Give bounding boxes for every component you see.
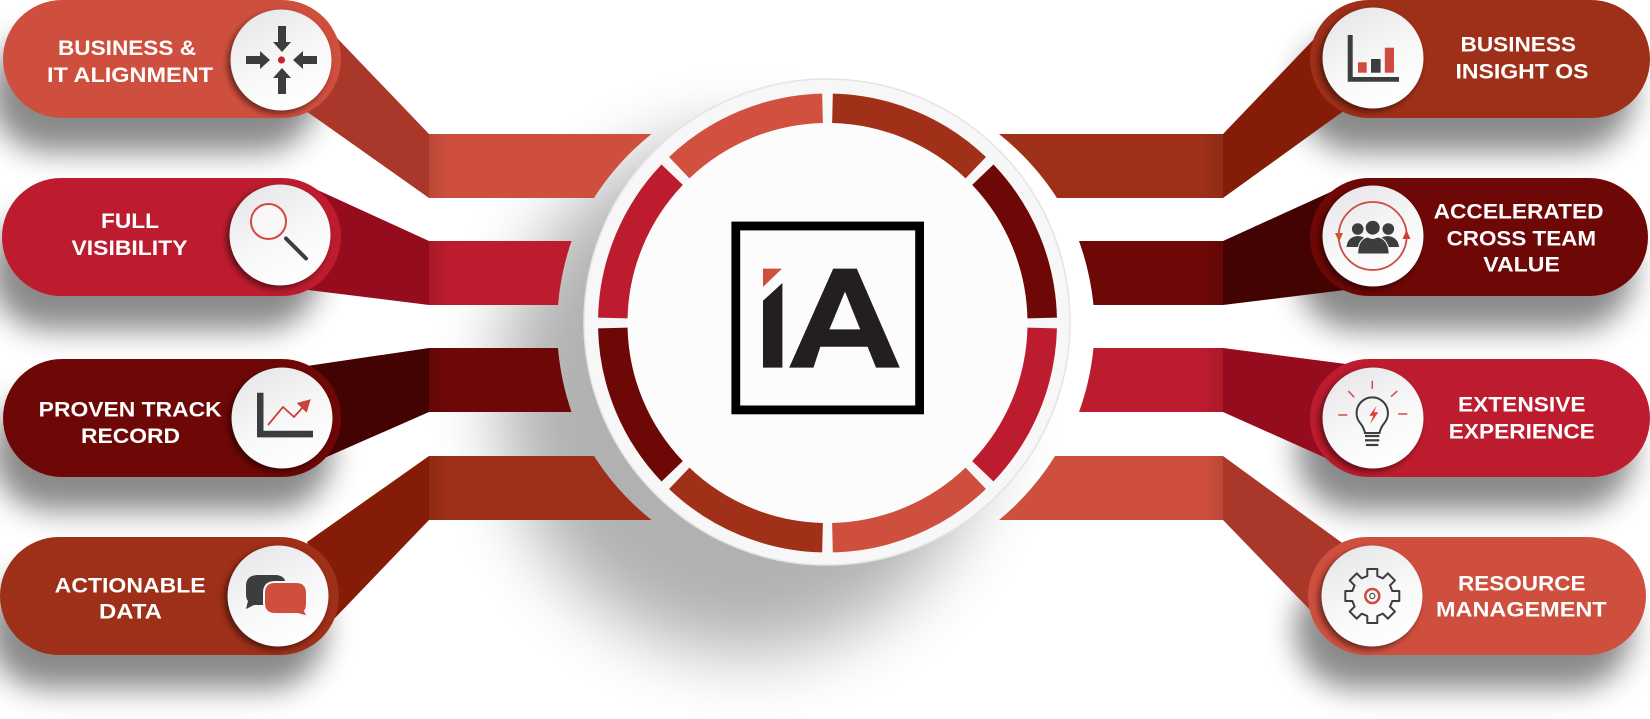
panel: proven track record (0, 348, 572, 511)
icon: chat bubbles (224, 546, 328, 650)
heading (1436, 573, 1607, 622)
panel: resource management (999, 456, 1646, 689)
heading (47, 37, 213, 87)
icon: light bulb (1319, 368, 1424, 472)
panel: business insight OS (999, 0, 1650, 198)
pill shadow (0, 571, 326, 689)
pill shadow (0, 393, 332, 511)
heading: INSIGHT OS (1456, 60, 1588, 83)
iA logo (736, 226, 920, 410)
pill (1310, 178, 1648, 296)
connector ribbon (307, 456, 429, 618)
heading: IT ALIGNMENT (47, 64, 213, 87)
pill shadow (1297, 212, 1634, 330)
heading (39, 399, 222, 448)
icon: gear (1318, 546, 1422, 650)
icon: bar chart (1319, 8, 1424, 112)
horizontal ribbon (429, 241, 572, 305)
segmented ring (613, 108, 1042, 538)
icon: team in circular arrows (1319, 186, 1424, 290)
inner white face (628, 123, 1028, 523)
white disc (584, 79, 1070, 565)
horizontal ribbon (429, 348, 572, 412)
heading: VISIBILITY (72, 237, 188, 260)
icon: rising line chart (228, 368, 332, 472)
connector ribbon (1223, 190, 1345, 305)
heading: BUSINESS & (58, 37, 196, 60)
pill (2, 178, 341, 296)
panel: actionable data (0, 456, 652, 689)
heading: BUSINESS (1460, 34, 1576, 57)
heading: ACTIONABLE (55, 574, 206, 597)
pill shadow (1297, 34, 1634, 152)
center disc drop shadow (500, 137, 990, 653)
pill shadow (0, 212, 320, 330)
connector ribbon (306, 38, 429, 198)
heading: VALUE (1483, 254, 1560, 277)
connector ribbon (307, 348, 429, 459)
heading (72, 210, 188, 260)
connector ribbon (1223, 348, 1346, 459)
pill (1310, 359, 1650, 477)
pill (0, 537, 339, 655)
heading (55, 574, 206, 623)
horizontal ribbon (429, 134, 652, 198)
icon: magnifier (226, 184, 330, 289)
connector ribbon (1223, 456, 1345, 612)
heading: EXTENSIVE (1458, 394, 1586, 417)
center disc (584, 79, 1070, 565)
panel: business and IT alignment (0, 0, 652, 198)
heading: PROVEN TRACK (39, 399, 222, 422)
heading: FULL (101, 210, 159, 233)
pill shadow (1297, 393, 1634, 511)
pill shadow (0, 34, 318, 152)
horizontal ribbon (1079, 241, 1223, 305)
heading: MANAGEMENT (1436, 599, 1607, 622)
horizontal ribbon (1079, 348, 1223, 412)
pill (1308, 537, 1646, 655)
panel: extensive experience (1079, 348, 1650, 511)
connector ribbon (1223, 37, 1345, 198)
horizontal ribbon (429, 456, 652, 520)
heading: CROSS TEAM (1447, 228, 1596, 251)
pill (3, 359, 341, 477)
icon: converging arrows (227, 10, 332, 114)
pill (1310, 0, 1650, 118)
heading: EXPERIENCE (1449, 420, 1595, 443)
pill (3, 0, 341, 118)
heading: RESOURCE (1458, 573, 1586, 596)
heading: ACCELERATED (1434, 200, 1604, 223)
heading (1434, 200, 1604, 277)
heading: RECORD (81, 425, 180, 448)
pill shadow (1295, 571, 1632, 689)
horizontal ribbon (999, 134, 1223, 198)
heading (1456, 34, 1588, 83)
panel: full visibility (0, 178, 572, 330)
connector ribbon (300, 187, 429, 305)
heading: DATA (99, 600, 162, 623)
panel: accelerated cross team value (1079, 178, 1648, 330)
heading (1449, 394, 1595, 443)
horizontal ribbon (999, 456, 1223, 520)
